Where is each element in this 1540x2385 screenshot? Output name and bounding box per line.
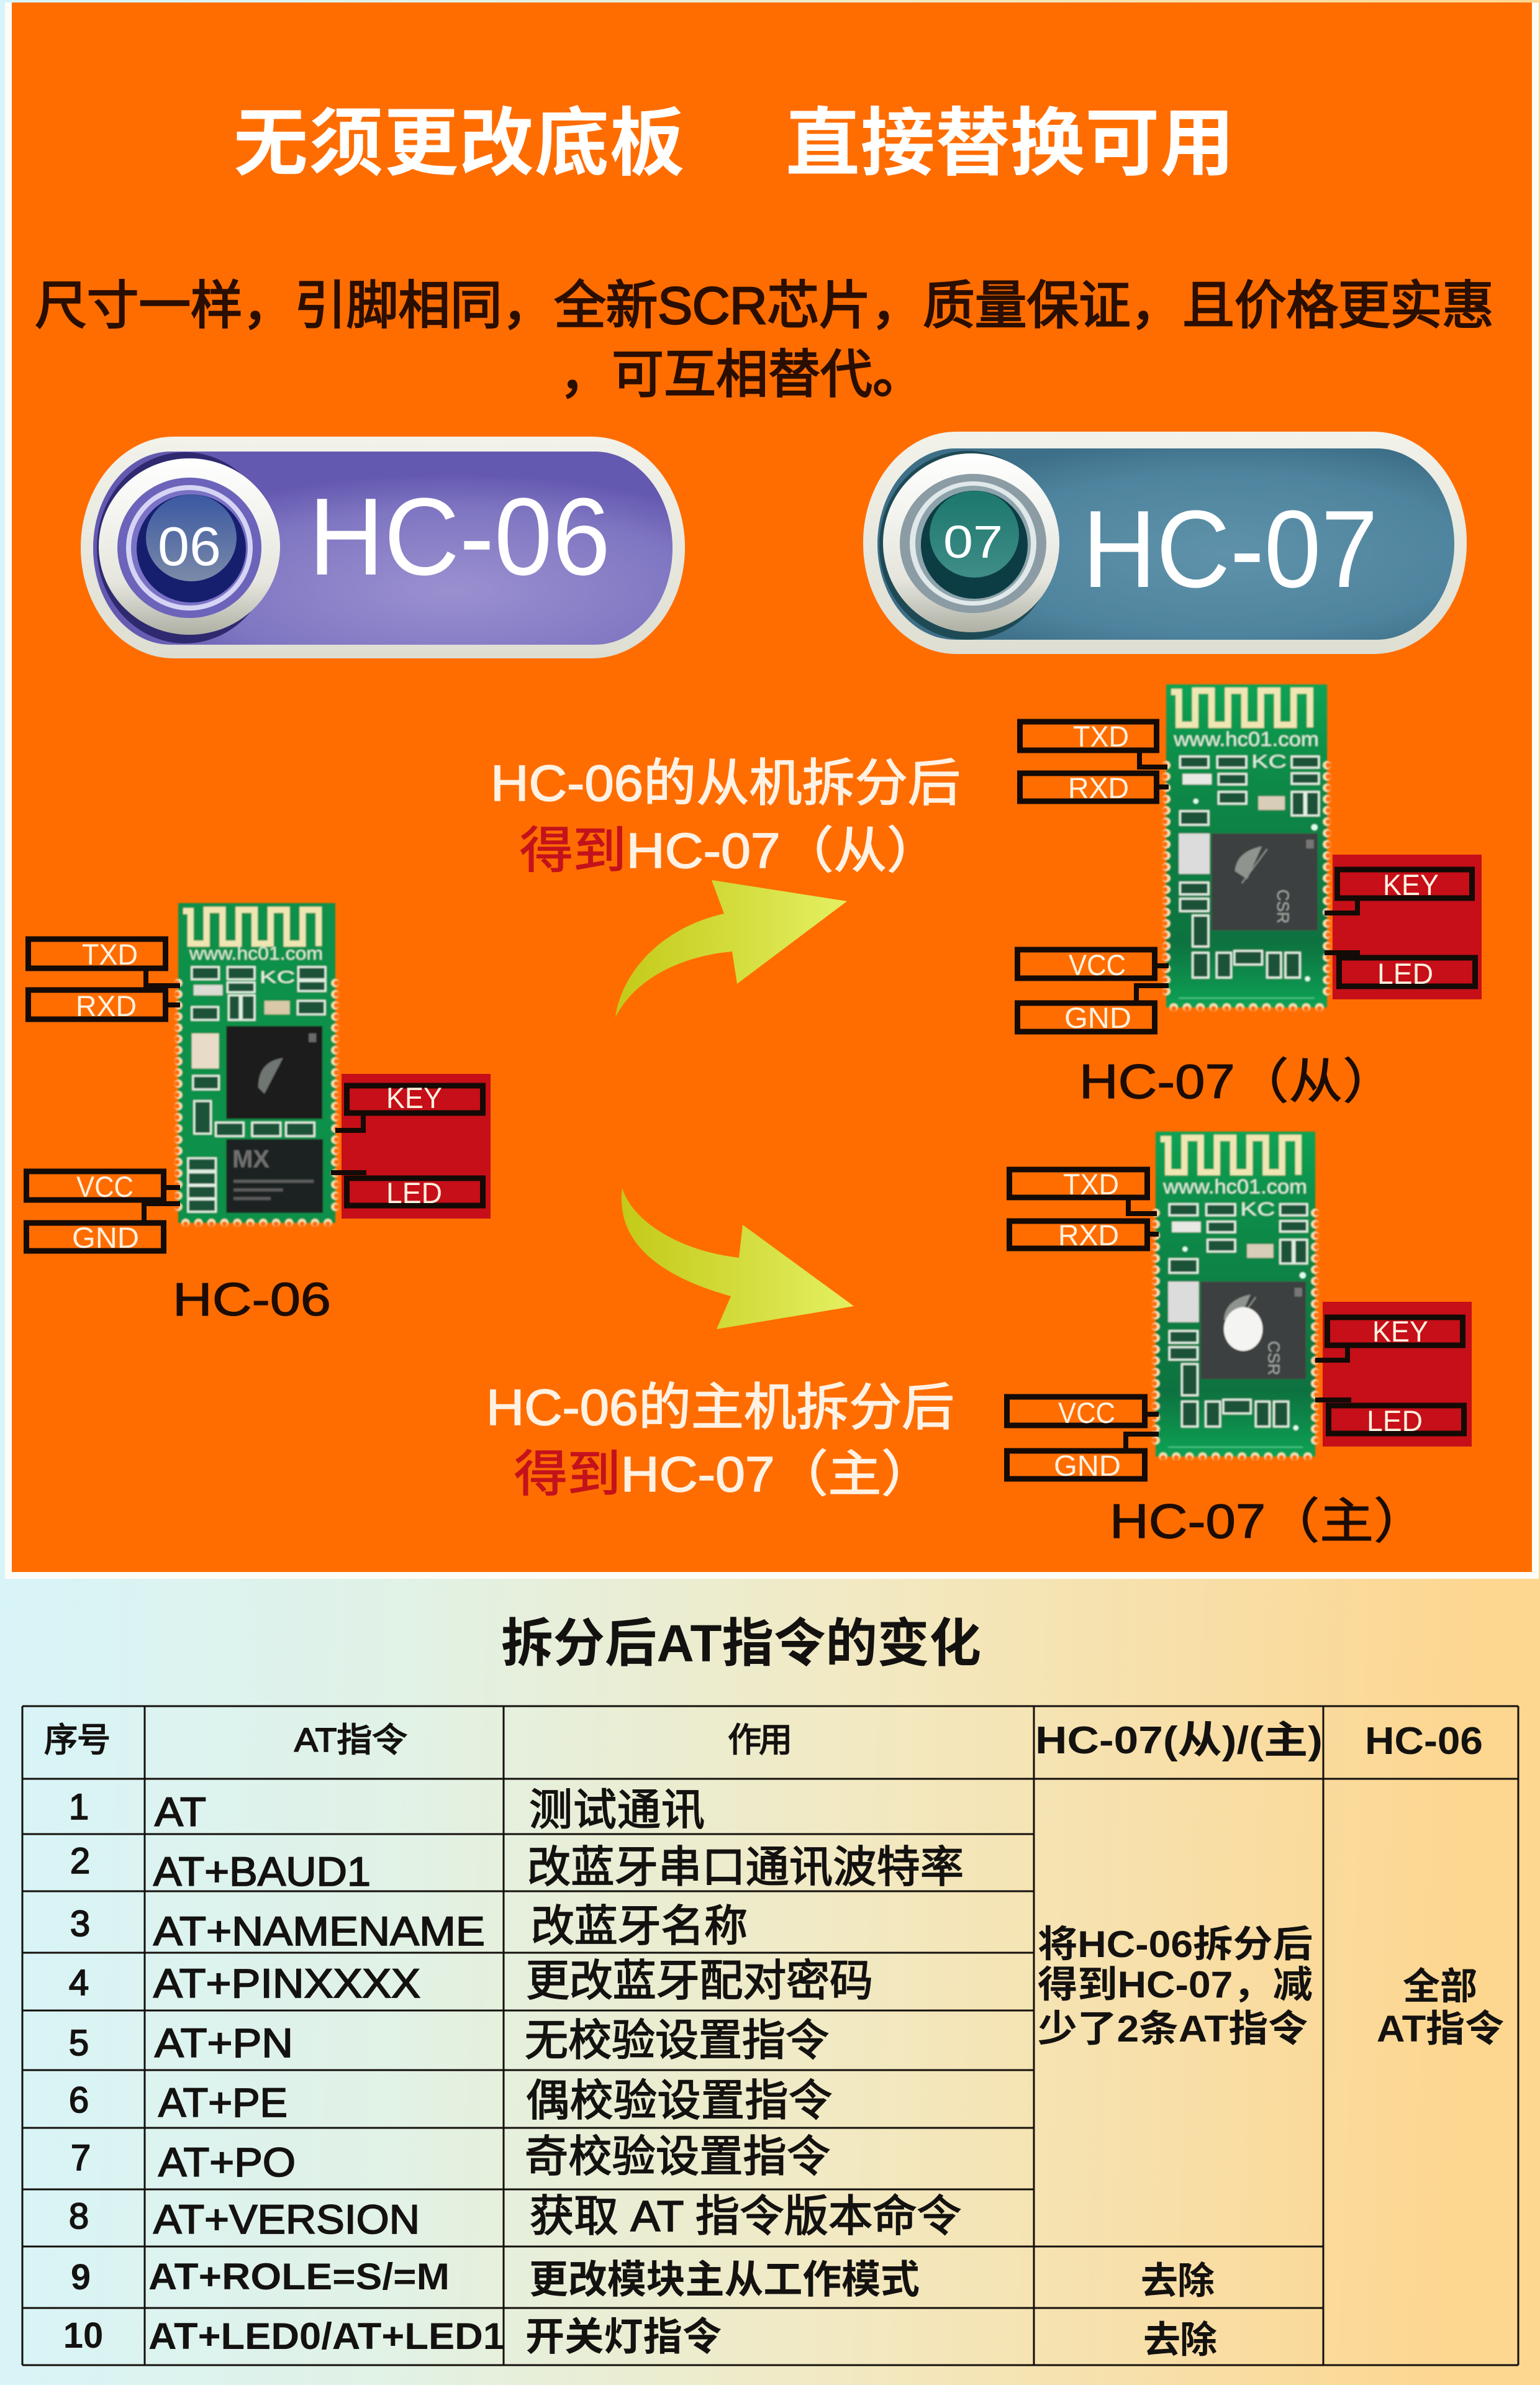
command column: AT+PINXXXX [153,1960,420,2006]
pin labels: VCC [1069,948,1126,981]
pin labels: KEY [1372,1315,1428,1348]
row numbers: 10 [63,2315,103,2356]
description text: 尺寸一样，引脚相同，全新SCR芯片，质量保证，且价格更实惠 [35,276,1494,335]
title [233,102,1234,185]
command column: AT+PN [155,2020,293,2066]
badge: HC-06 [81,437,685,658]
pin labels: RXD [76,989,137,1022]
row numbers: 1 [69,1787,89,1827]
function column: 测试通讯 [529,1786,705,1834]
circuit board: www.hc01.com [1173,728,1319,750]
pin connectors [1136,753,1360,1001]
merged note: HC-07 column [1038,1924,1313,2361]
row numbers: 9 [71,2257,91,2297]
merged note: HC-07 column: 将HC-06拆分后 [1038,1924,1313,1965]
pin labels: RXD [1068,771,1129,804]
header row: AT指令 [294,1722,407,1759]
command column: AT+VERSION [153,2196,420,2242]
title: 无须更改底板 [233,102,684,185]
circuit board: www.hc01.com [1162,1176,1307,1198]
circuit board: CSR [1274,889,1292,924]
table heading: 拆分后AT指令的变化 [501,1614,981,1673]
circuit board: KC [1251,752,1287,772]
caption: slave split: HC-06的从机拆分后 [491,755,961,812]
pin labels: KEY [1383,868,1439,901]
merged note: HC-07 column: 得到HC-07，减 [1038,1964,1313,2006]
pin labels: TXD [82,938,138,971]
command column: AT+LED0/AT+LED1 [148,2315,505,2357]
table grid [22,1706,1518,2365]
header row: 作用 [728,1722,792,1759]
description text [35,276,1494,404]
module: HC-07 slave [1017,684,1482,1109]
arrow: down to HC-07 master [622,1188,854,1329]
pin labels: LED [1367,1404,1423,1437]
pin labels: TXD [1073,720,1129,753]
module name: HC-07（从） [1079,1054,1397,1109]
red pin highlight [342,1074,491,1219]
row numbers: 3 [70,1904,90,1944]
merged note: HC-07 column: 去除 [1141,2260,1215,2302]
badge: HC-06: HC-06 [309,475,610,598]
row numbers [63,1787,103,2356]
circuit board: KC [1240,1199,1275,1220]
red pin highlight [1323,1302,1472,1447]
pin labels: VCC [76,1170,134,1203]
red pin highlight [1333,855,1482,999]
circuit board [1165,684,1328,1009]
circuit board: KC [260,968,295,987]
row numbers: 2 [70,1841,90,1881]
circuit board [1154,1132,1316,1458]
function column: 奇校验设置指令 [525,2132,830,2181]
command column: AT+PE [158,2079,288,2125]
row numbers: 4 [69,1963,89,2003]
badge: HC-07: 07 [943,516,1003,568]
module name: HC-07（主） [1110,1494,1428,1548]
command column: AT+BAUD1 [153,1848,371,1894]
pin labels [1007,1168,1464,1482]
pin labels: GND [1064,1001,1131,1034]
pin labels: GND [72,1221,139,1254]
description text: ，可互相替代。 [559,345,925,404]
pin labels: KEY [386,1081,442,1114]
pin labels: RXD [1058,1219,1119,1252]
caption: master split [486,1379,954,1502]
title: 直接替换可用 [786,102,1234,185]
circuit board [177,903,337,1224]
merged note: HC-06 column [1377,1966,1504,2050]
header row: 序号 [44,1722,111,1759]
caption: slave split: 得到HC-07（从） [520,823,940,878]
command column: AT+ROLE=S/=M [148,2256,450,2297]
module: HC-06 [26,903,491,1325]
merged note: HC-06 column: 全部 [1403,1966,1477,2007]
pin connectors [1126,1200,1351,1448]
pin labels: VCC [1058,1396,1115,1429]
badge: HC-07 [863,432,1467,654]
command column: AT [155,1789,206,1835]
function column: 开关灯指令 [525,2315,722,2359]
function column: 更改蓝牙配对密码 [526,1956,873,2005]
pin labels [1017,720,1475,1034]
merged note: HC-07 column: 去除 [1143,2319,1217,2361]
pin labels: GND [1054,1449,1121,1482]
panel: orange upper section [12,2,1532,1572]
row numbers: 5 [69,2023,89,2063]
pin labels [26,938,483,1254]
header row: HC-06 [1365,1720,1483,1763]
table: AT commands [22,1706,1518,2365]
pin labels: LED [386,1176,442,1209]
pin connectors [144,971,366,1220]
module: HC-07 master [1007,1132,1472,1548]
command column: AT+NAMENAME [153,1908,485,1954]
row numbers: 7 [71,2138,91,2178]
header row [44,1719,1483,1763]
merged note: HC-06 column: AT指令 [1377,2008,1504,2050]
function column: 改蓝牙名称 [531,1902,748,1950]
arrow: up to HC-07 slave [615,880,847,1017]
merged note: HC-07 column: 少了2条AT指令 [1038,2008,1308,2050]
command column [148,1789,505,2357]
badge: HC-06: 06 [158,516,221,577]
badge: HC-07: HC-07 [1082,488,1378,611]
function column: 无校验设置指令 [525,2016,829,2065]
circuit board: www.hc01.com [189,943,323,964]
function column: 更改模块主从工作模式 [529,2258,920,2302]
caption: master split: HC-06的主机拆分后 [486,1379,954,1436]
row numbers: 6 [69,2080,89,2120]
command column: AT+PO [158,2139,296,2185]
circuit board: MX [232,1146,270,1173]
circuit board: CSR [1264,1341,1283,1375]
module name: HC-06 [173,1273,331,1325]
function column [525,1786,964,2359]
white frame [5,2,1539,1579]
caption: slave split [491,755,961,878]
pin labels: LED [1377,957,1433,990]
caption: master split: 得到HC-07（主） [514,1447,935,1502]
function column: 改蓝牙串口通讯波特率 [527,1843,964,1891]
header row: HC-07(从)/(主) [1035,1719,1323,1762]
function column: 偶校验设置指令 [526,2076,832,2125]
pin labels: TXD [1063,1168,1119,1201]
row numbers: 8 [69,2196,89,2237]
function column: 获取 AT 指令版本命令 [530,2192,961,2240]
